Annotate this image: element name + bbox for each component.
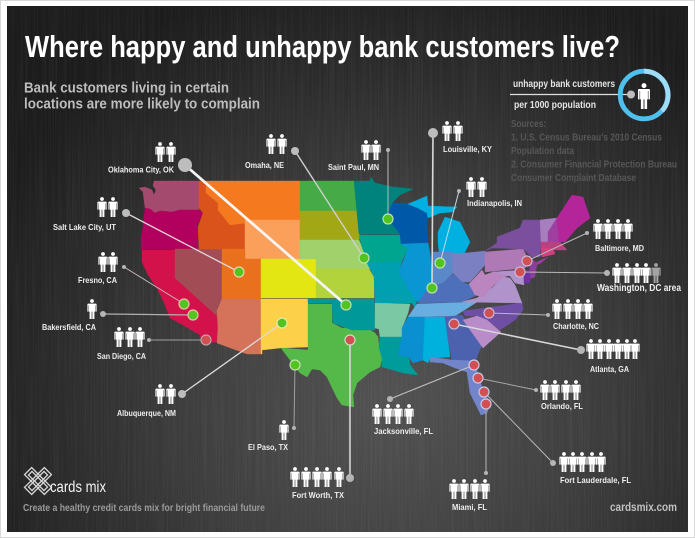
callout: Fort Worth, TX — [290, 335, 355, 500]
callout: Louisville, KY — [427, 121, 492, 293]
callout: Fort Lauderdale, FL — [479, 387, 631, 485]
subtitle — [24, 80, 260, 112]
callout: Indianapolis, IN — [435, 177, 522, 268]
sources: Consumer Complaint Database — [511, 172, 636, 184]
sources: Population data — [511, 145, 574, 157]
callout: Saint Paul, MN: Saint Paul, MN — [328, 162, 379, 172]
callout: Orlando, FL — [473, 373, 583, 411]
callout: Bakersfield, CA: Bakersfield, CA — [42, 322, 96, 332]
callout: Charlotte, NC — [484, 299, 599, 331]
callout: El Paso, TX: El Paso, TX — [248, 442, 288, 452]
callout: Albuquerque, NM: Albuquerque, NM — [117, 408, 176, 418]
callout: Orlando, FL: Orlando, FL — [541, 401, 583, 411]
callout: Miami, FL — [449, 399, 491, 512]
callout: Fort Worth, TX: Fort Worth, TX — [292, 490, 344, 500]
callout: Bakersfield, CA — [42, 299, 198, 332]
legend — [510, 71, 668, 119]
website: cardsmix.com — [610, 502, 677, 514]
callout: Washington, DC area — [515, 263, 681, 294]
callout: Salt Lake City, UT — [53, 197, 244, 277]
callout: Indianapolis, IN: Indianapolis, IN — [467, 198, 522, 208]
callout: Albuquerque, NM — [117, 318, 287, 418]
callout: Salt Lake City, UT: Salt Lake City, UT — [53, 222, 117, 232]
sources: 1. U.S. Census Bureau's 2010 Census — [511, 132, 662, 144]
callout: Fresno, CA — [78, 252, 189, 309]
tagline: Create a healthy credit cards mix for bright financial future — [23, 503, 265, 514]
sources — [511, 118, 677, 184]
callout: El Paso, TX — [248, 360, 300, 452]
sources: Sources: — [511, 118, 546, 130]
callout: Baltimore, MD — [522, 219, 644, 266]
callout: Louisville, KY: Louisville, KY — [443, 144, 492, 154]
callout: Atlanta, GA — [449, 319, 640, 374]
legend: unhappy bank customers — [513, 79, 615, 90]
callout: Washington, DC area: Washington, DC area — [597, 283, 681, 294]
logo: cards mix: cards mix — [50, 479, 106, 496]
subtitle: Bank customers living in certain — [24, 80, 229, 96]
subtitle: locations are more likely to complain — [24, 96, 260, 112]
callout: Fort Lauderdale, FL: Fort Lauderdale, FL — [560, 475, 631, 485]
map of the United States — [139, 177, 590, 415]
legend: per 1000 population — [514, 100, 596, 111]
callout: Fresno, CA: Fresno, CA — [78, 275, 117, 285]
callout: San Diego, CA: San Diego, CA — [97, 351, 146, 361]
callout: Jacksonville, FL: Jacksonville, FL — [374, 426, 433, 436]
callout: Omaha, NE: Omaha, NE — [245, 160, 284, 170]
callout: Atlanta, GA: Atlanta, GA — [590, 364, 629, 374]
callout: Omaha, NE — [245, 134, 369, 263]
callout: Charlotte, NC: Charlotte, NC — [553, 321, 599, 331]
callout: Saint Paul, MN — [328, 140, 393, 224]
callout: Oklahoma City, OK — [108, 142, 351, 310]
callout: San Diego, CA — [97, 327, 211, 361]
callout: Jacksonville, FL — [372, 360, 479, 436]
logo: cards mix — [18, 461, 106, 501]
callout: Oklahoma City, OK: Oklahoma City, OK — [108, 164, 175, 174]
callout: Miami, FL: Miami, FL — [452, 502, 487, 512]
callout: Baltimore, MD: Baltimore, MD — [595, 243, 644, 253]
